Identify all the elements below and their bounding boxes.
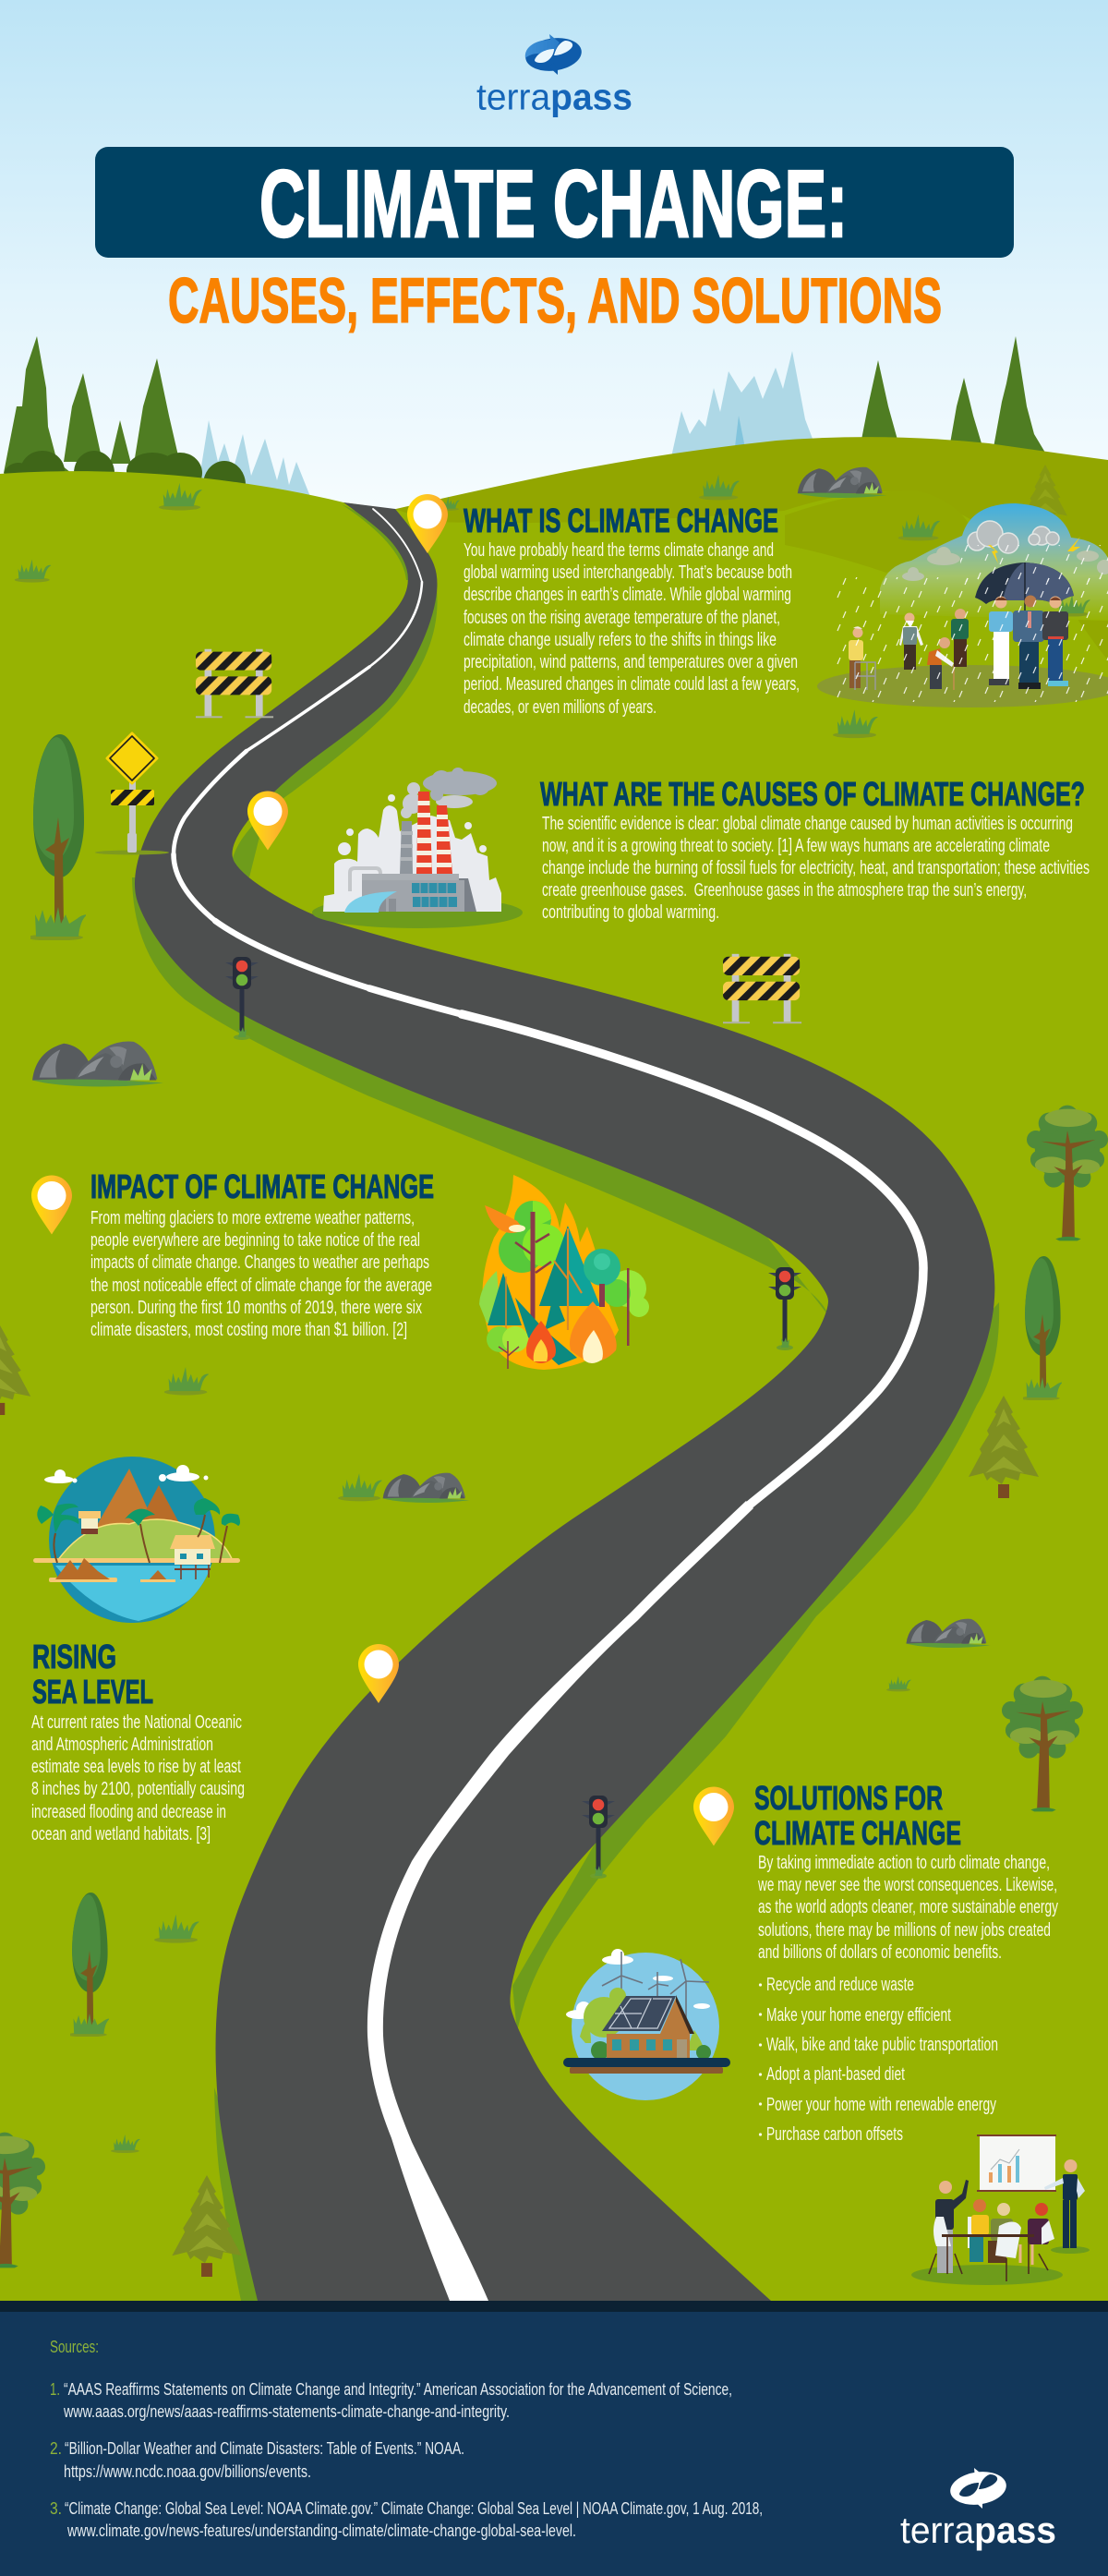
road shoulder shadows <box>132 504 999 2301</box>
body text <box>31 1712 245 1844</box>
illustration: tropical island <box>33 1457 240 1627</box>
panel: rising sea level <box>31 1638 245 1844</box>
panel: solutions for climate change <box>754 1779 1058 2145</box>
body text: You have probably heard the terms climate change and <box>464 540 774 561</box>
heading: WHAT IS CLIMATE CHANGE <box>464 502 778 539</box>
scenery: warning sign <box>95 733 169 855</box>
white steam silhouette <box>323 805 501 912</box>
main green ground <box>0 471 1108 2301</box>
illustration: forest fire <box>479 1175 649 1370</box>
source 2: https://www.ncdc.noaa.gov/billions/events. <box>64 2462 311 2481</box>
solutions list <box>759 1975 998 2145</box>
logo: terrapass footer <box>900 2468 1056 2551</box>
body text: climate change usually refers to the shifts in things like <box>464 630 777 650</box>
figure: boy in dark sweater <box>1042 597 1068 686</box>
body text: period. Measured changes in climate could last a few years, <box>464 674 800 695</box>
road <box>135 502 994 2301</box>
body text: From melting glaciers to more extreme weather patterns, <box>90 1208 415 1228</box>
body text: global warming used interchangeably. That’s because both <box>464 562 792 583</box>
standing colleague <box>935 2180 969 2273</box>
lightning <box>988 537 1080 563</box>
body text: contributing to global warming. <box>542 902 719 923</box>
body text: people everywhere are beginning to take notice of the real <box>90 1230 420 1251</box>
illustration: team meeting <box>911 2135 1090 2285</box>
road centre line <box>174 509 923 2301</box>
logo: terrapass top <box>476 34 632 118</box>
location pins <box>31 494 734 1845</box>
source 3 <box>50 2499 763 2540</box>
pipe frame <box>350 868 380 891</box>
heading: SEA LEVEL <box>32 1673 153 1711</box>
scenery: grass tufts <box>15 475 940 2153</box>
heading: SOLUTIONS FOR <box>754 1779 943 1817</box>
body text: the most noticeable effect of climate change for the average <box>90 1276 432 1296</box>
burning trees <box>479 1201 649 1346</box>
body text: and billions of dollars of economic benefits. <box>758 1942 1002 1963</box>
mid hill shading <box>785 490 1108 660</box>
body text <box>90 1208 432 1340</box>
solutions list: Recycle and reduce waste <box>766 1975 914 1995</box>
logo: terrapass top: terrapass <box>476 78 632 118</box>
panel: impact of climate change <box>90 1167 434 1340</box>
figure: bent man with cane <box>927 637 954 690</box>
scenery: pine trees <box>0 465 1067 2277</box>
scenery: road barriers <box>194 649 801 1023</box>
scenery: rocks <box>32 467 991 1648</box>
heading: IMPACT OF CLIMATE CHANGE <box>90 1167 434 1205</box>
bushes <box>487 1326 528 1369</box>
footer panel <box>0 2301 1108 2576</box>
scenery: oak trees <box>0 1106 1108 2268</box>
illustration: solar house <box>563 1949 730 2100</box>
figure: man with vest <box>899 613 923 670</box>
body text <box>757 1853 1058 1963</box>
heading: CLIMATE CHANGE <box>754 1814 961 1852</box>
source 2 <box>50 2439 464 2481</box>
storm clouds <box>902 521 1108 581</box>
heading <box>754 1779 961 1852</box>
sky background <box>0 0 1108 536</box>
figure: man in green sweater <box>951 609 969 667</box>
source 3: “Climate Change: Global Sea Level: NOAA Climate.gov.” Climate Change: Global Sea Level | NOAA Climate.gov, 1 Aug. 2018, <box>65 2499 763 2518</box>
body text <box>542 814 1090 923</box>
source 2: 2. <box>50 2439 62 2458</box>
umbrella <box>975 562 1074 628</box>
source 1: 1. <box>50 2380 60 2399</box>
illustration: factory <box>312 768 523 928</box>
body text: ocean and wetland habitats. [3] <box>31 1824 211 1844</box>
body text: impacts of climate change. Changes to weather are perhaps <box>90 1252 429 1273</box>
scenery: traffic lights <box>225 957 801 1879</box>
source 3: 3. <box>50 2499 62 2518</box>
figure: man with walker <box>849 626 875 690</box>
palms <box>37 1498 240 1533</box>
body text: describe changes in earth’s climate. While global warming <box>464 585 791 605</box>
rain <box>836 577 1108 702</box>
smoke <box>401 768 497 818</box>
plant building <box>344 874 476 913</box>
solutions list: Make your home energy efficient <box>766 2005 951 2026</box>
back hill <box>388 437 1108 647</box>
chart board <box>977 2135 1056 2192</box>
body text: 8 inches by 2100, potentially causing <box>31 1779 245 1799</box>
sources label: Sources: <box>50 2338 99 2356</box>
body text: increased flooding and decrease in <box>31 1802 226 1822</box>
heading: RISING <box>32 1638 116 1675</box>
scenery: tall trees <box>26 734 1063 2037</box>
ferns <box>515 1293 577 1365</box>
body text: estimate sea levels to rise by at least <box>31 1757 241 1777</box>
source 2: “Billion-Dollar Weather and Climate Disasters: Table of Events.” NOAA. <box>65 2439 464 2458</box>
panel: what is climate change <box>464 502 800 718</box>
panel: causes of climate change <box>540 775 1090 923</box>
body text: person. During the first 10 months of 2019, there were six <box>90 1298 422 1318</box>
seated colleagues and table <box>929 2199 1054 2281</box>
source 1 <box>50 2380 732 2421</box>
illustration: people under storm <box>817 503 1108 707</box>
logo: terrapass footer: terrapass <box>900 2510 1056 2551</box>
body text: climate disasters, most costing more than $1 billion. [2] <box>90 1320 407 1340</box>
figure: man in suit <box>1013 595 1044 689</box>
chimneys <box>400 792 452 874</box>
body text: focuses on the rising average temperature of the planet, <box>464 608 780 628</box>
presenter <box>1044 2159 1085 2248</box>
body text: At current rates the National Oceanic <box>31 1712 242 1733</box>
solutions list: Power your home with renewable energy <box>766 2095 996 2115</box>
solutions list: Purchase carbon offsets <box>766 2124 903 2145</box>
solutions list: Walk, bike and take public transportation <box>766 2035 998 2055</box>
source 1: “AAAS Reaffirms Statements on Climate Change and Integrity.” American Association for the Advancement of Science, <box>64 2380 732 2399</box>
body text: precipitation, wind patterns, and temperatures over a given <box>464 652 798 672</box>
background trees right <box>671 336 1045 462</box>
body text <box>464 540 800 718</box>
heading <box>32 1638 153 1711</box>
flames <box>485 1205 617 1363</box>
body text: and Atmospheric Administration <box>31 1735 213 1755</box>
source 1: www.aaas.org/news/aaas-reaffirms-statements-climate-change-and-integrity. <box>63 2402 510 2421</box>
body text: decades, or even millions of years. <box>464 697 656 718</box>
background trees left <box>4 336 311 509</box>
solutions list: Adopt a plant-based diet <box>766 2064 905 2085</box>
source 3: www.climate.gov/news-features/understanding-climate/climate-change-global-sea-level. <box>66 2522 576 2540</box>
figure: man in white trousers <box>989 597 1013 685</box>
